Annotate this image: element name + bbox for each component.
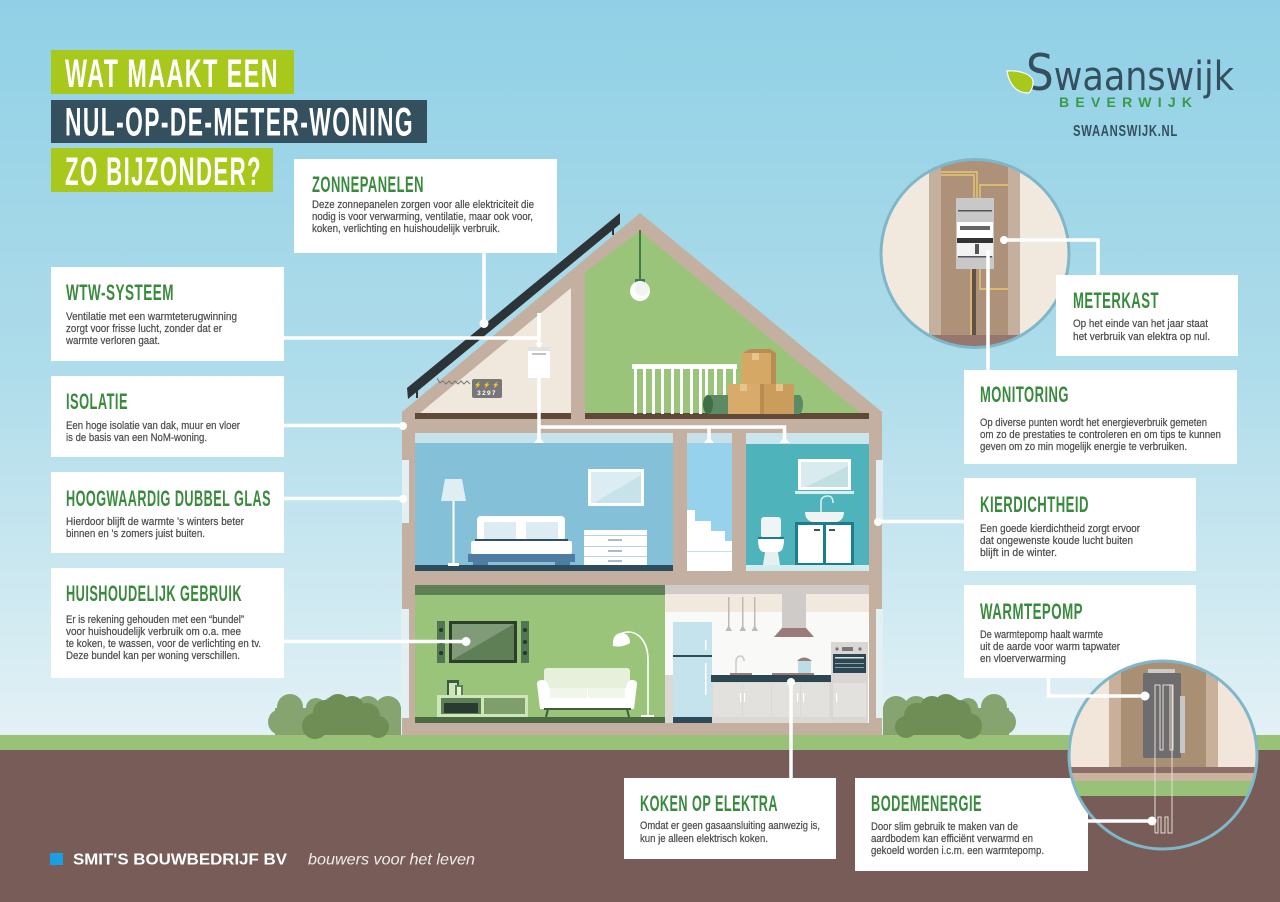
fridge [673,622,712,723]
card: kierdichtheid: KIERDICHTHEID [980,492,1089,517]
electricity meter: 3297 [477,390,497,397]
connector lines [284,253,964,778]
detail circle: heat pump and ground loop [1069,655,1259,856]
logo: Swaanswijk Beverwijk [1007,44,1235,140]
logo: Swaanswijk Beverwijk: Swaanswijk [1026,44,1235,102]
solar panel [407,213,620,399]
card: hoogwaardig dubbel glas: binnen en 's zomers juist buiten. [66,528,205,540]
card: hoogwaardig dubbel glas: HOOGWAARDIG DUBBEL GLAS [66,486,271,511]
line: warmtepomp [1048,678,1150,700]
kitchen [665,585,869,723]
card: monitoring: Op diverse punten wordt het energieverbruik gemeten [980,417,1207,429]
card: bodemenergie: gekoeld worden i.c.m. een warmtepomp. [871,845,1044,857]
stairwell [687,433,732,571]
card: zonnepanelen: koken, verlichting en huishoudelijk verbruik. [312,223,500,235]
living room [415,585,665,723]
footer: Smit's Bouwbedrijf [50,852,475,868]
card: zonnepanelen: nodig is voor verwarming, ventilatie, maar ook voor, [312,211,533,223]
hanging utensils [726,597,758,631]
bed [468,516,575,565]
sink cabinet [795,496,854,565]
floor lamp [441,479,466,566]
media unit [437,680,528,717]
footer: Smit's Bouwbedrijf: SMIT'S BOUWBEDRIJF BV [73,852,288,868]
card: huishoudelijk gebruik: Deze bundel kan per woning verschillen. [66,650,240,662]
bathroom [746,433,869,571]
card: warmtepomp: De warmtepomp haalt warmte [980,629,1103,641]
bedroom picture [588,469,644,506]
extractor hood [774,594,814,637]
card: isolatie: is de basis van een NoM-woning. [66,432,207,444]
card: warmtepomp [964,585,1196,678]
toilet [758,517,784,565]
card: zonnepanelen: Deze zonnepanelen zorgen voor alle elektriciteit die [312,199,534,211]
card: bodemenergie: aardbodem kan efficiënt verwarmd en [871,833,1033,845]
card: kierdichtheid: blijft in de winter. [980,547,1057,559]
card: bodemenergie: Door slim gebruik te maken van de [871,821,1018,833]
card: meterkast: METERKAST [1073,288,1159,313]
card: monitoring [964,370,1237,464]
card: hoogwaardig dubbel glas: Hierdoor blijft de warmte 's winters beter [66,516,244,528]
card: WTW-systeem: warmte verloren gaat. [65,335,160,347]
card: huishoudelijk gebruik: HUISHOUDELIJK GEBRUIK [66,581,242,606]
railing [632,364,737,414]
card: huishoudelijk gebruik: voor huishoudelijk verbruik om o.a. mee [66,626,241,638]
card: huishoudelijk gebruik: Er is rekening gehouden met een “bundel” [66,614,244,626]
line: bodemenergie [1088,816,1156,826]
card: meterkast: Op het einde van het jaar staat [1073,318,1208,330]
title: ZO BIJZONDER? [65,150,262,194]
bushes left [268,694,401,739]
card: isolatie: Een hoge isolatie van dak, muur en vloer [66,420,240,432]
title [51,50,427,194]
card: bodemenergie [855,778,1088,871]
attic right room [585,230,869,419]
card: meterkast: het verbruik van elektra op nul. [1073,331,1210,343]
line: monitoring and meterkast [988,236,1098,370]
arc lamp [613,632,654,717]
boxes [728,349,794,414]
title: NUL-OP-DE-METER-WONING [65,100,414,144]
electricity meter: ⚡ ⚡ ⚡ [474,381,500,389]
electricity meter [437,378,502,398]
house shell [402,213,882,735]
attic left room [415,288,571,419]
bedroom [415,433,673,571]
card: huishoudelijk gebruik: te koken, te wassen, voor de verlichting en tv. [66,638,261,650]
card: kierdichtheid [964,478,1196,571]
card: huishoudelijk gebruik [51,568,284,678]
card: WTW-systeem: WTW-SYSTEEM [66,280,174,305]
counter and cabinets [711,656,831,723]
card: koken op elektra: KOKEN OP ELEKTRA [640,791,778,816]
soil [0,750,1280,902]
footer: Smit's Bouwbedrijf: bouwers voor het leven [308,852,475,868]
sofa [537,668,637,717]
card: warmtepomp: WARMTEPOMP [980,599,1083,624]
card: kierdichtheid: Een goede kierdichtheid zorgt ervoor [980,523,1140,535]
card: warmtepomp: uit de aarde voor warm tapwater [980,641,1120,653]
card: WTW-systeem: zorgt voor frisse lucht, zonder dat er [66,323,222,335]
card: kierdichtheid: dat ongewenste koude lucht buiten [980,535,1133,547]
card: koken op elektra: kun je alleen elektrisch koken. [640,833,768,845]
pendant lamp [630,230,650,301]
card: warmtepomp: en vloerverwarming [980,653,1066,665]
oven [831,642,868,723]
logo: Swaanswijk Beverwijk: BEVERWIJK [1059,94,1192,110]
title: WAT MAAKT EEN [65,52,279,96]
card: koken op elektra: Omdat er geen gasaansluiting aanwezig is, [640,820,820,832]
card: isolatie: ISOLATIE [66,389,128,414]
card: bodemenergie: BODEMENERGIE [871,791,982,816]
card: monitoring: MONITORING [980,382,1069,407]
card: monitoring: geven om zo min mogelijk energie te verbruiken. [980,441,1187,453]
card: isolatie [51,376,284,457]
card: WTW-systeem [51,267,284,361]
house [401,213,883,735]
mirror [795,459,854,494]
television [437,621,529,663]
logo: Swaanswijk Beverwijk: SWAANSWIJK.NL [1073,123,1178,140]
card: monitoring: om zo de prestaties te controleren en om tips te kunnen [980,429,1221,441]
wall windows [402,460,409,523]
card: hoogwaardig dubbel glas [51,472,284,553]
card: zonnepanelen: ZONNEPANELEN [312,172,424,197]
card: zonnepanelen [294,159,557,253]
WTW unit [528,347,550,378]
card: koken op elektra [624,778,836,859]
detail circle: meter cabinet [881,155,1069,355]
grass strip [0,735,1280,750]
card: WTW-systeem: Ventilatie met een warmteterugwinning [66,311,237,323]
insulation roll [703,395,803,414]
bushes right [883,694,1016,739]
dresser [584,530,647,565]
card: meterkast [1056,275,1238,356]
